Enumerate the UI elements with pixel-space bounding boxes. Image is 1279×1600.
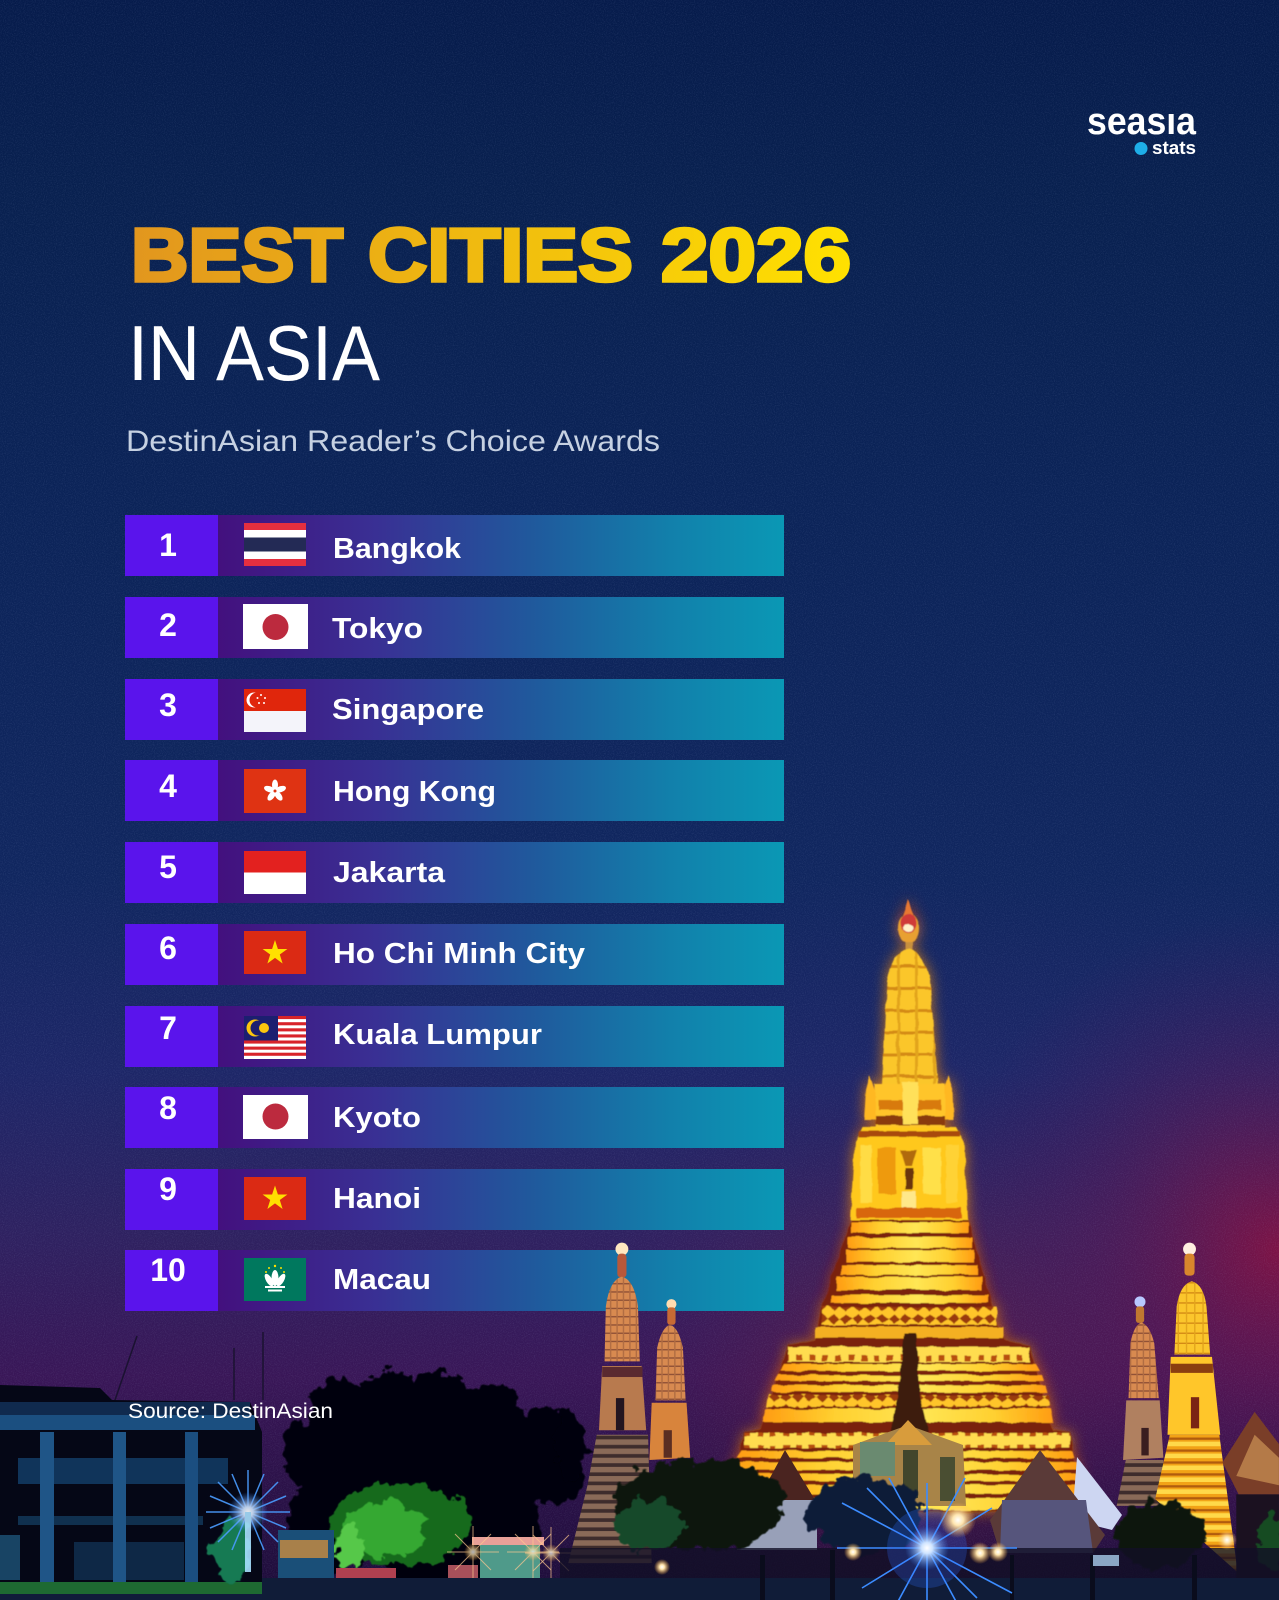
row 5: Jakarta bbox=[125, 842, 784, 903]
row 7: Kuala Lumpur: Kuala Lumpur bbox=[333, 1019, 542, 1051]
light flare: blue bbox=[206, 1470, 290, 1572]
row 5: Jakarta: 5 bbox=[159, 849, 177, 885]
photo: Wat Arun side towers bbox=[568, 1243, 1279, 1582]
left hall bbox=[737, 1450, 817, 1550]
photo: Wat Arun main prang bbox=[726, 900, 1082, 1512]
left tall tower bbox=[568, 1243, 652, 1563]
photo: temple porch, halls and foreground bbox=[262, 1409, 1279, 1600]
light flare: white bbox=[940, 1502, 976, 1538]
left short tower bbox=[649, 1299, 690, 1460]
white slope bbox=[1072, 1457, 1122, 1530]
spire ornaments and flanking finials bbox=[864, 1075, 954, 1127]
shop stalls bbox=[270, 1530, 610, 1600]
row 3: Singapore: Singapore bbox=[332, 694, 484, 726]
far right roof bbox=[1223, 1412, 1279, 1582]
upper terraces bbox=[831, 1222, 988, 1303]
row 9: Hanoi: 9 bbox=[159, 1171, 177, 1207]
middle ornament band bbox=[766, 1395, 1050, 1407]
building facade bbox=[0, 1385, 262, 1600]
row 2: Tokyo: 2 bbox=[159, 607, 177, 643]
row 9: Hanoi: Hanoi bbox=[333, 1183, 421, 1215]
row 4: Hong Kong: 4 bbox=[159, 768, 177, 804]
light flares: warm row bbox=[654, 1530, 1237, 1575]
terrace base silhouette bbox=[726, 1220, 1082, 1512]
mid block bbox=[850, 1127, 968, 1220]
source note: Source: DestinAsian bbox=[128, 1400, 333, 1423]
central dark spine bbox=[890, 1333, 928, 1432]
row 8: Kyoto: 8 bbox=[159, 1090, 177, 1126]
cranes and masts bbox=[115, 1332, 263, 1400]
row 3: Singapore bbox=[125, 679, 784, 740]
row 1: Bangkok: 1 bbox=[159, 527, 177, 563]
title: best cities 2026: 2026 bbox=[661, 213, 851, 297]
light flares: warm bbox=[447, 1526, 577, 1579]
logo: seasia stats bbox=[1088, 114, 1196, 155]
right hall bbox=[990, 1450, 1105, 1553]
upper spire bbox=[882, 949, 938, 1085]
middle terrace stripes bbox=[762, 1364, 1053, 1422]
title: best cities 2026: CITIES bbox=[368, 213, 633, 297]
light flare: blue burst bbox=[837, 1478, 1017, 1600]
row 4: Hong Kong: Hong Kong bbox=[333, 776, 496, 808]
row 6: Ho Chi Minh City: Ho Chi Minh City bbox=[333, 938, 585, 970]
row 6: Ho Chi Minh City bbox=[125, 924, 784, 985]
central porch bbox=[853, 1420, 966, 1506]
finial bbox=[898, 900, 919, 951]
row 5: Jakarta: Jakarta bbox=[333, 857, 446, 889]
row 7: Kuala Lumpur bbox=[125, 1006, 784, 1067]
row 1: Bangkok bbox=[125, 515, 784, 576]
row 9: Hanoi bbox=[125, 1169, 784, 1230]
title: best cities 2026 bbox=[131, 213, 851, 297]
row 8: Kyoto bbox=[125, 1087, 784, 1148]
title line two: in Asia: IN ASIA bbox=[128, 309, 380, 397]
row 10: Macau bbox=[125, 1250, 784, 1311]
row 4: Hong Kong bbox=[125, 760, 784, 821]
row 10: Macau: 10 bbox=[150, 1252, 186, 1288]
row 10: Macau: Macau bbox=[333, 1264, 431, 1296]
ranking list bbox=[125, 515, 784, 1311]
ornamented terraces bbox=[788, 1307, 1030, 1362]
logo: seasia stats: seasia bbox=[1087, 101, 1197, 143]
lower crenellated terrace bbox=[745, 1433, 1070, 1448]
row 1: Bangkok: Bangkok bbox=[333, 533, 462, 565]
trees in front of temple bbox=[556, 1409, 1279, 1570]
riverfront fence and bottom strip bbox=[262, 1548, 1279, 1600]
right golden tower bbox=[1155, 1243, 1238, 1572]
title: best cities 2026: BEST bbox=[131, 213, 343, 297]
logo: seasia stats: stats bbox=[1152, 138, 1196, 158]
row 8: Kyoto: Kyoto bbox=[333, 1102, 421, 1134]
big dark tree bbox=[282, 1370, 581, 1600]
lowest stripes bbox=[730, 1451, 1080, 1510]
photo: riverside building and tree, lower left bbox=[0, 1332, 610, 1600]
row 2: Tokyo: Tokyo bbox=[332, 613, 423, 645]
row 2: Tokyo bbox=[125, 597, 784, 658]
green lit foliage bbox=[214, 1483, 470, 1584]
row 7: Kuala Lumpur: 7 bbox=[159, 1010, 177, 1046]
subtitle: DestinAsian Reader’s Choice Awards bbox=[126, 425, 660, 458]
row 3: Singapore: 3 bbox=[159, 687, 177, 723]
right stone tower bbox=[1117, 1296, 1165, 1506]
row 6: Ho Chi Minh City: 6 bbox=[159, 930, 177, 966]
